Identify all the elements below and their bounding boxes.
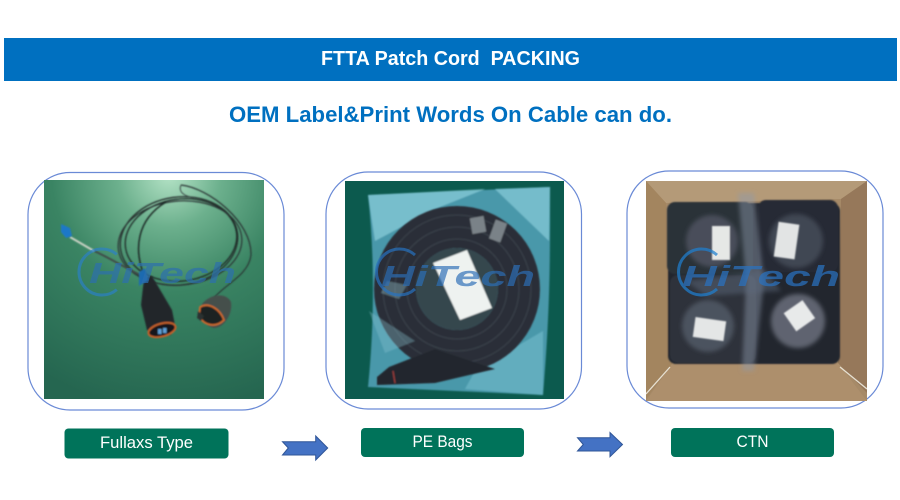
watermark logo: HiTech [381, 261, 535, 293]
panel: PE Bags [326, 172, 582, 409]
watermark logo: HiTech [89, 258, 236, 290]
label: PE Bags: PE Bags [412, 433, 472, 451]
label: PE Bags [361, 428, 524, 457]
watermark logo: HiTech [682, 261, 840, 293]
watermark logo [377, 249, 535, 295]
panel: CTN [627, 171, 883, 408]
watermark logo [79, 249, 236, 295]
photo: carton with four coiled cables [646, 181, 867, 401]
label: CTN: CTN [736, 433, 768, 451]
watermark logo [679, 249, 840, 295]
arrow: to PE Bags [282, 436, 328, 460]
arrow: to CTN [578, 432, 622, 457]
title banner [4, 38, 897, 81]
label: Fullaxs Type: Fullaxs Type [100, 434, 193, 452]
title banner: FTTA Patch Cord PACKING [321, 48, 580, 70]
panel: Fullaxs Type [28, 172, 284, 410]
subtitle: OEM Label&Print Words On Cable can do. [229, 102, 672, 127]
label: CTN [671, 428, 834, 457]
label: Fullaxs Type [64, 428, 228, 458]
photo: coiled cable in PE bag [345, 181, 564, 399]
photo: FTTA patch cord on green mat [44, 180, 264, 399]
